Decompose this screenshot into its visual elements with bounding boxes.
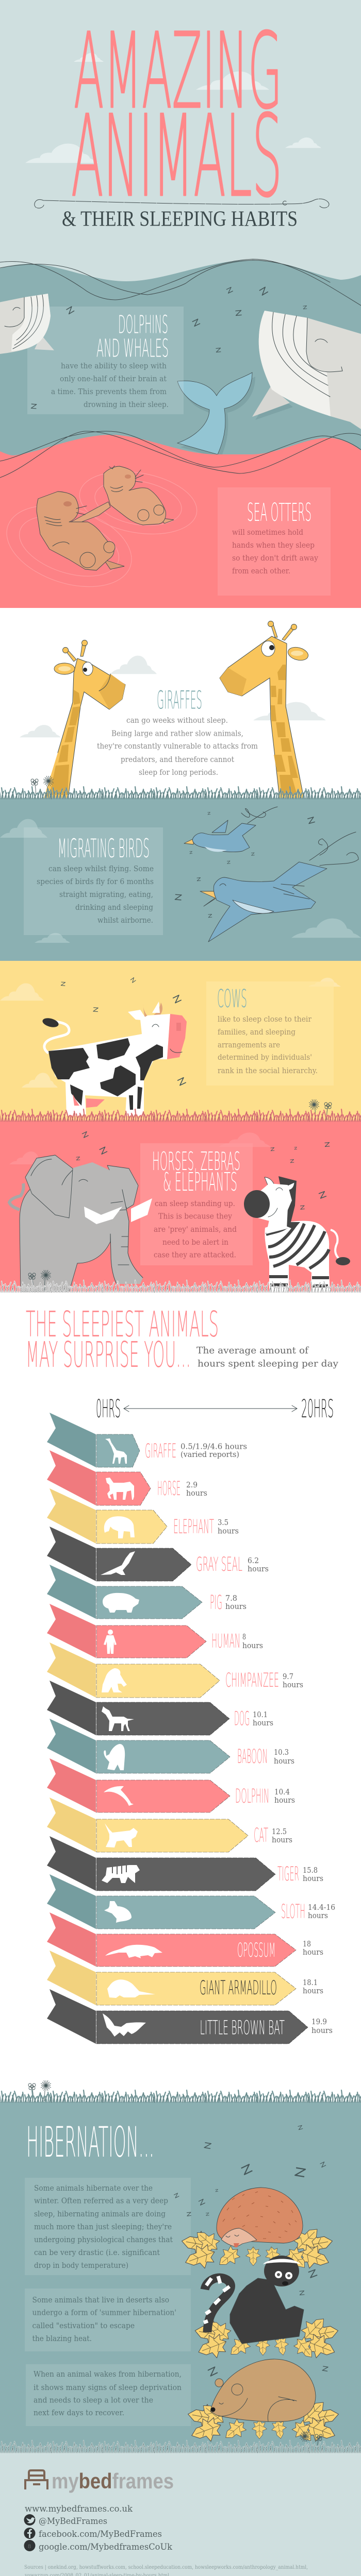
bar: giant armadillo: 18.1 xyxy=(303,1978,318,1987)
icon: facebook xyxy=(24,2528,35,2539)
panel: dolphins text xyxy=(27,307,184,414)
section: giraffes xyxy=(0,608,361,798)
text: dolphins: have the ability to sleep with xyxy=(61,361,167,370)
bar: cat: CAT xyxy=(254,1824,268,1846)
text: hibernation intro: undergoing physiological changes that xyxy=(34,2235,173,2244)
bar: sloth xyxy=(47,1874,335,1929)
text: sea otters: hands when they sleep xyxy=(232,540,315,550)
lemur on leaves xyxy=(193,2256,340,2363)
panel: sea otters text xyxy=(218,487,331,596)
section: dolphins and whales xyxy=(0,259,361,464)
sleeping z marks xyxy=(174,812,315,918)
bar: giant armadillo: hours xyxy=(303,1986,323,1995)
flowers xyxy=(309,1099,332,1120)
bar: tiger: hours xyxy=(303,1874,323,1883)
bear on leaves xyxy=(186,2359,341,2447)
section: migrating birds: MIGRATING BIRDS xyxy=(58,834,150,863)
bar: sloth: SLOTH xyxy=(281,1901,305,1923)
right whale xyxy=(252,311,361,429)
bar: giraffe: 0.5/1.9/4.6 hours xyxy=(180,1442,247,1451)
bar: elephant xyxy=(47,1488,239,1544)
icon: twitter xyxy=(24,2514,35,2526)
bar: cat: 12.5 xyxy=(272,1827,287,1836)
section: title background xyxy=(0,0,361,289)
bar: sloth: hours xyxy=(308,1911,328,1920)
section: cows xyxy=(0,961,361,1121)
text: estivation: undergo a form of 'summer hibernation' xyxy=(32,2308,176,2317)
bar: human: 8 xyxy=(242,1632,246,1641)
teal background xyxy=(0,798,361,961)
bar: cat: hours xyxy=(272,1835,292,1844)
text: cows: rank in the social hierarchy. xyxy=(218,1066,318,1075)
text: horses: need to be alert in xyxy=(162,1238,228,1247)
text: cows: families, and sleeping xyxy=(218,1027,296,1037)
bar: chimpanzee: 9.7 xyxy=(283,1672,293,1681)
text: waking: next few days to recover. xyxy=(34,2408,124,2417)
clouds xyxy=(20,656,326,737)
icon: google plus: 8 xyxy=(28,2543,31,2550)
panel: waking xyxy=(26,2364,191,2426)
text: estivation: Some animals that live in deserts also xyxy=(32,2295,169,2304)
section: sea otters xyxy=(0,431,361,608)
bar: giraffe xyxy=(47,1413,247,1467)
sources xyxy=(24,2565,308,2576)
text: cows: like to sleep close to their xyxy=(218,1014,312,1024)
bar: giraffe: (varied reports) xyxy=(180,1450,239,1459)
bar: sloth: 14.4-16 xyxy=(308,1903,335,1912)
text: cows: arrangements are xyxy=(218,1040,280,1049)
bar: horse: 2.9 xyxy=(186,1480,198,1489)
text: hibernation intro: can be very drastic (i.e. significant xyxy=(34,2248,160,2257)
text: hibernation intro: Some animals hibernate over the xyxy=(34,2183,153,2193)
elephant xyxy=(9,1155,152,1292)
bar: giraffe: GIRAFFE xyxy=(145,1440,176,1462)
text: horses: can sleep standing up. xyxy=(155,1199,235,1208)
grass: white to teal xyxy=(0,787,361,799)
text: dolphins: a time. This prevents them from xyxy=(51,387,167,396)
bar: dog: hours xyxy=(253,1718,273,1727)
zebra xyxy=(244,1176,350,1293)
bar: giant armadillo xyxy=(47,1951,323,2005)
text: giraffes xyxy=(97,716,258,777)
bar: human: hours xyxy=(242,1641,263,1650)
bar: little brown bat xyxy=(47,1989,333,2044)
section: cows: COWS xyxy=(217,985,247,1013)
bar: little brown bat: 19.9 xyxy=(311,2017,327,2026)
panel: estivation xyxy=(25,2289,191,2351)
text: waking xyxy=(34,2369,182,2417)
axis: 0 to 20 hours xyxy=(96,1395,334,1423)
yellow background xyxy=(0,961,361,1121)
logo: mybedframes: mybedframes xyxy=(52,2469,174,2493)
bar: elephant: 3.5 xyxy=(218,1518,228,1527)
light background xyxy=(0,2452,361,2576)
white background xyxy=(0,1293,361,2102)
teal background xyxy=(0,2102,361,2452)
bar: tiger xyxy=(47,1836,323,1891)
bar: pig xyxy=(47,1565,247,1619)
clouds xyxy=(0,978,341,1088)
bar: opossum: 18 xyxy=(303,1939,311,1948)
section: hibernation xyxy=(0,2102,361,2452)
bar: dolphin: 10.4 xyxy=(274,1787,290,1797)
text: estivation: the blazing heat. xyxy=(32,2334,92,2343)
text: giraffes: predators, and therefore cannot xyxy=(121,755,234,764)
bar: gray seal: 6.2 xyxy=(248,1556,259,1565)
bar: dog: DOG xyxy=(234,1707,250,1730)
bar: baboon: 10.3 xyxy=(274,1748,289,1757)
text: birds: species of birds fly for 6 months xyxy=(37,877,154,886)
text: cows: determined by individuals' xyxy=(218,1053,312,1062)
panel: cows text xyxy=(206,981,334,1086)
text: birds: whilst airborne. xyxy=(97,916,153,925)
text: sea otters: so they don't drift away xyxy=(232,553,318,563)
text: giraffes: sleep for long periods. xyxy=(139,768,218,777)
bar: opossum xyxy=(47,1912,323,1967)
chart subtitle: The average amount of xyxy=(196,1345,309,1356)
whale tail xyxy=(177,372,255,459)
clouds behind title xyxy=(25,53,321,163)
title divider flourish xyxy=(35,199,329,208)
text: waking: and needs to sleep a lot over the xyxy=(34,2396,153,2405)
bar: human xyxy=(47,1604,263,1658)
bar: pig: PIG xyxy=(210,1591,222,1614)
text: birds xyxy=(37,864,154,925)
grass: teal to footer xyxy=(0,2441,361,2453)
grass: yellow to pink xyxy=(0,1109,361,1122)
bar: chimpanzee: CHIMPANZEE xyxy=(225,1669,279,1691)
bar: gray seal: hours xyxy=(248,1564,269,1573)
text: hibernation intro xyxy=(34,2183,173,2270)
bar: little brown bat: hours xyxy=(311,2026,333,2035)
text: birds: drinking and sleeping xyxy=(75,903,153,912)
bar: human: HUMAN xyxy=(211,1630,240,1652)
sleeping z marks xyxy=(30,287,307,409)
pink sea xyxy=(0,435,361,608)
chart subtitle xyxy=(196,1345,339,1369)
bar: tiger: 15.8 xyxy=(303,1866,318,1875)
bar: baboon: hours xyxy=(274,1756,294,1766)
pink background xyxy=(0,1121,361,1292)
axis: 0 to 20 hours: 0HRS xyxy=(96,1395,121,1423)
cow xyxy=(41,1002,187,1116)
flowers xyxy=(31,776,54,796)
bar: horse: hours xyxy=(186,1488,207,1498)
left whale xyxy=(0,294,54,354)
large bird xyxy=(200,832,358,942)
bar: elephant: ELEPHANT xyxy=(173,1516,214,1538)
text: giraffes: they're constantly vulnerable to attacks from xyxy=(97,741,258,751)
sleeping z marks xyxy=(76,1131,330,1209)
section: horses zebras elephants xyxy=(0,1121,361,1293)
teal sea xyxy=(0,260,361,464)
bar: opossum: OPOSSUM xyxy=(237,1939,275,1961)
grass: pink to white xyxy=(0,1280,361,1293)
white background xyxy=(0,608,361,798)
wave lines xyxy=(0,431,361,478)
bar: chimpanzee: hours xyxy=(283,1680,303,1689)
text: giraffes: Being large and rather slow animals, xyxy=(111,728,243,738)
text: dolphins: drowning in their sleep. xyxy=(84,400,169,409)
bar: dog xyxy=(47,1681,273,1735)
title xyxy=(71,10,282,222)
heading: dolphins and whales xyxy=(96,310,169,363)
small otter xyxy=(69,466,174,526)
text: dolphins: only one-half of their brain at xyxy=(60,374,167,383)
text: giraffes: can go weeks without sleep. xyxy=(126,716,228,725)
text: birds: can sleep whilst flying. Some xyxy=(48,864,154,873)
water ripples xyxy=(0,463,202,601)
icon: google plus xyxy=(24,2540,35,2551)
sources: Sources | onekind.org, howstuffworks.com, school.sleepeducation.com, howsleepworks.com/anthropology_animal.html, xyxy=(24,2565,308,2570)
bar: tiger: TIGER xyxy=(277,1863,299,1885)
text: waking: When an animal wakes from hibernation, xyxy=(34,2369,182,2379)
text: waking: it shows many signs of sleep deprivation xyxy=(34,2383,182,2392)
contact details: @MyBedFrames xyxy=(39,2516,107,2527)
sleeping z marks xyxy=(174,2125,329,2376)
section: dolphins and whales: DOLPHINS xyxy=(118,310,168,339)
section: footer xyxy=(0,2452,361,2576)
bar: horse xyxy=(47,1450,207,1505)
contact details: facebook.com/MyBedFrames xyxy=(39,2529,162,2539)
section: dolphins and whales: AND WHALES xyxy=(96,334,169,363)
bar: dog: 10.1 xyxy=(253,1710,268,1719)
bar: gray seal xyxy=(47,1527,269,1581)
big otter xyxy=(37,492,124,570)
bar: dolphin xyxy=(47,1758,295,1812)
bar: cat xyxy=(47,1798,292,1852)
text: sea otters xyxy=(232,528,318,575)
bar: pig: 7.8 xyxy=(225,1594,237,1603)
hedgehog on leaves xyxy=(179,2188,335,2274)
text: hibernation intro: much more than just sleeping; they're xyxy=(34,2222,172,2231)
text: sea otters: from each other. xyxy=(232,566,290,575)
wave lines xyxy=(0,259,361,306)
text: horses: This is because they xyxy=(158,1212,232,1221)
clouds xyxy=(9,1132,271,1164)
contact details: google.com/MybedframesCoUk xyxy=(39,2542,173,2552)
sleeping z marks xyxy=(61,977,186,1086)
text: estivation: called "estivation" to escape xyxy=(32,2321,135,2330)
subtitle: & THEIR SLEEPING HABITS xyxy=(62,207,298,231)
bar: chimpanzee xyxy=(47,1642,303,1698)
flowers xyxy=(28,2080,51,2101)
text: dolphins xyxy=(51,361,169,409)
chart heading xyxy=(26,1304,219,1376)
heading: horses, zebras and elephants xyxy=(152,1147,240,1197)
left giraffe xyxy=(44,640,125,798)
bar: horse: HORSE xyxy=(157,1478,180,1500)
bar: baboon: BABOON xyxy=(237,1745,268,1768)
bar: dolphin: DOLPHIN xyxy=(235,1785,269,1807)
text: hibernation intro: sleep, hibernating animals are doing xyxy=(34,2209,166,2218)
text: horses xyxy=(154,1199,237,1259)
chart subtitle: hours spent sleeping per day xyxy=(198,1358,339,1369)
bar: baboon xyxy=(47,1719,294,1773)
text: horses: case they are attacked. xyxy=(154,1250,236,1259)
text: sea otters: will sometimes hold xyxy=(232,528,303,537)
small bird xyxy=(184,807,277,852)
contact details: www.mybedframes.co.uk xyxy=(25,2504,133,2514)
text: hibernation intro: drop in body temperature) xyxy=(34,2261,128,2270)
bar: gray seal: GRAY SEAL xyxy=(196,1553,242,1575)
text: hibernation intro: winter. Often referred as a very deep xyxy=(34,2196,168,2205)
text: estivation xyxy=(32,2295,176,2343)
section: sleepiest animals chart xyxy=(0,1293,361,2102)
section: giraffes: GIRAFFES xyxy=(157,686,202,715)
flowers xyxy=(300,2431,322,2452)
bar: pig: hours xyxy=(225,1602,247,1611)
right giraffe xyxy=(220,621,309,798)
section: horses zebras elephants: & ELEPHANTS xyxy=(163,1167,237,1197)
bar: elephant: hours xyxy=(218,1526,239,1535)
bar: opossum: hours xyxy=(303,1947,323,1957)
bar: dolphin: hours xyxy=(274,1795,295,1805)
panel: horses text xyxy=(140,1143,253,1265)
section: hibernation: HIBERNATION... xyxy=(26,2119,154,2167)
grass: white to teal hibernation xyxy=(0,2090,361,2103)
text: cows xyxy=(218,1014,318,1075)
section: migrating birds xyxy=(0,798,361,961)
panel: hibernation intro xyxy=(25,2178,191,2275)
text: horses: are 'prey' animals, and xyxy=(154,1225,237,1234)
panel: birds text xyxy=(24,827,163,935)
clouds xyxy=(0,819,361,943)
contact details xyxy=(25,2504,173,2552)
flowers xyxy=(28,1270,51,1291)
text: birds: straight migrating, eating, xyxy=(59,890,153,899)
